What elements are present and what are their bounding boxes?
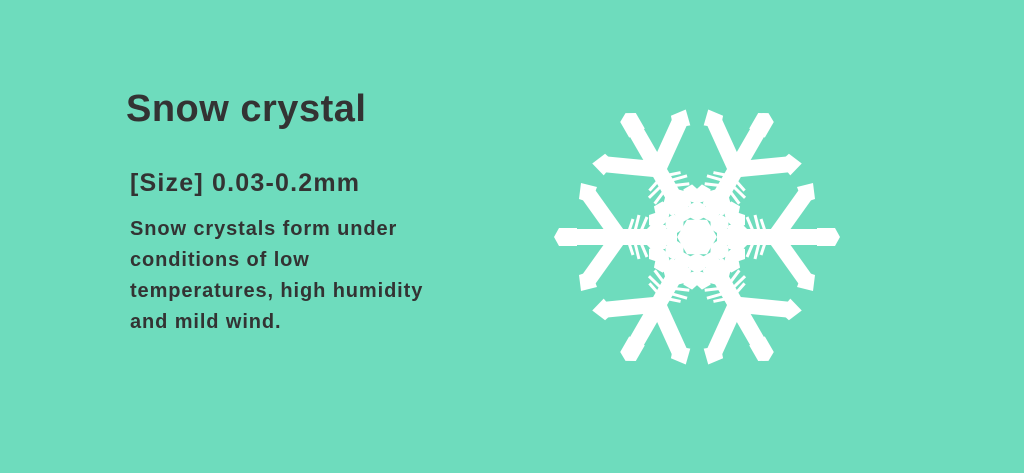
description	[130, 218, 423, 333]
title: Snow crystal	[126, 88, 366, 130]
description: conditions of low	[130, 249, 310, 271]
description: temperatures, high humidity	[130, 280, 423, 302]
size line: [Size] 0.03-0.2mm	[130, 169, 360, 197]
description: and mild wind.	[130, 311, 282, 333]
description: Snow crystals form under	[130, 218, 397, 240]
